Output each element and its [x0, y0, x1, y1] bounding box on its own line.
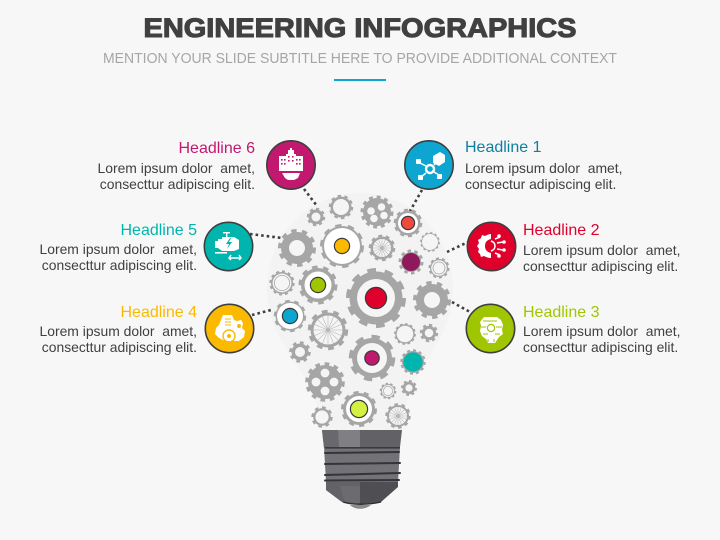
connector: headline 1	[410, 190, 422, 211]
large gear with red dot	[348, 270, 404, 326]
gear thin right	[421, 233, 439, 251]
gear thin center	[395, 324, 415, 344]
node: headline 1	[405, 139, 622, 192]
text: headline 2: Lorem ipsum dolor amet,	[523, 242, 680, 258]
gear small right	[421, 325, 437, 341]
gear small double ring	[380, 384, 396, 398]
text: headline 5: consecttur adipiscing elit.	[42, 257, 197, 273]
text: headline 5	[40, 222, 197, 273]
text: headline 2: Headline 2	[523, 222, 600, 239]
node: headline 6	[98, 140, 315, 192]
gears cluster	[270, 196, 449, 428]
text: headline 4: consecttur adipiscing elit.	[42, 339, 197, 355]
node: headline 2	[467, 222, 680, 274]
connector: headline 5	[250, 234, 282, 238]
gear four holes top	[362, 197, 392, 227]
gear tiny bottom	[402, 381, 416, 395]
gear thin top	[330, 196, 352, 218]
icon: gear with circuit	[467, 222, 516, 271]
text: headline 4	[40, 304, 197, 355]
text: headline 4: Headline 4	[120, 304, 197, 321]
text: headline 6: Headline 6	[178, 140, 255, 157]
light bulb glow	[267, 193, 453, 431]
gear with blue dot	[275, 301, 305, 331]
icon: engine and wrench	[204, 222, 253, 271]
node: headline 5	[40, 222, 253, 273]
text: headline 6: Lorem ipsum dolor amet,	[98, 160, 255, 176]
text: headline 1: Headline 1	[465, 139, 542, 156]
text: headline 3: Lorem ipsum dolor amet,	[523, 323, 680, 339]
gear with yellow dot	[322, 226, 362, 266]
connector: headline 3	[452, 302, 470, 312]
gear small left	[290, 342, 310, 362]
text: headline 2: consecttur adipiscing elit.	[523, 258, 678, 274]
node: headline 4	[40, 304, 254, 355]
gear small top	[308, 209, 324, 225]
text: headline 2	[523, 222, 680, 274]
icon: buildings on gear	[267, 141, 315, 189]
connector: headline 2	[447, 242, 468, 252]
icon: machine parts	[466, 304, 515, 353]
bulb socket	[322, 430, 402, 509]
gear four holes bottom	[307, 364, 343, 400]
text: headline 1: consectur adipiscing elit.	[465, 176, 616, 192]
text: headline 3: Headline 3	[523, 304, 600, 321]
spoked gear upper	[370, 236, 394, 260]
spoked gear bottom	[386, 404, 410, 428]
gear thin double ring left	[270, 272, 294, 294]
solid gear left	[280, 231, 314, 265]
connector: headline 4	[252, 310, 271, 315]
solid gear right	[415, 283, 449, 317]
icon: engine block	[205, 304, 254, 353]
text: headline 3: consecttur adipiscing elit.	[523, 339, 678, 355]
gear with lime dot	[342, 392, 376, 426]
text: headline 3	[523, 304, 680, 355]
text: headline 5: Lorem ipsum dolor amet,	[40, 241, 197, 257]
gear with green dot	[300, 267, 336, 303]
text: headline 4: Lorem ipsum dolor amet,	[40, 323, 197, 339]
gear with magenta dot	[351, 337, 393, 379]
icon: cube and gear network	[405, 141, 453, 189]
text: headline 1	[465, 139, 622, 192]
node: headline 3	[466, 304, 680, 355]
gear with purple dot	[400, 251, 422, 273]
gear with red dot	[395, 210, 421, 236]
gear thin double ring right	[430, 258, 448, 278]
text: headline 1: Lorem ipsum dolor amet,	[465, 160, 622, 176]
text: headline 6	[98, 140, 255, 192]
text: headline 6: consecttur adipiscing elit.	[100, 176, 255, 192]
gear with teal dot	[402, 350, 424, 374]
subtitle: MENTION YOUR SLIDE SUBTITLE HERE TO PROVIDE ADDITIONAL CONTEXT	[103, 51, 617, 67]
title: ENGINEERING INFOGRAPHICS	[144, 13, 576, 43]
text: headline 5: Headline 5	[120, 222, 197, 239]
spoked gear lower	[310, 312, 346, 348]
title accent line	[334, 79, 386, 81]
gear thin bottom left	[312, 408, 332, 426]
connector: headline 6	[304, 189, 317, 206]
